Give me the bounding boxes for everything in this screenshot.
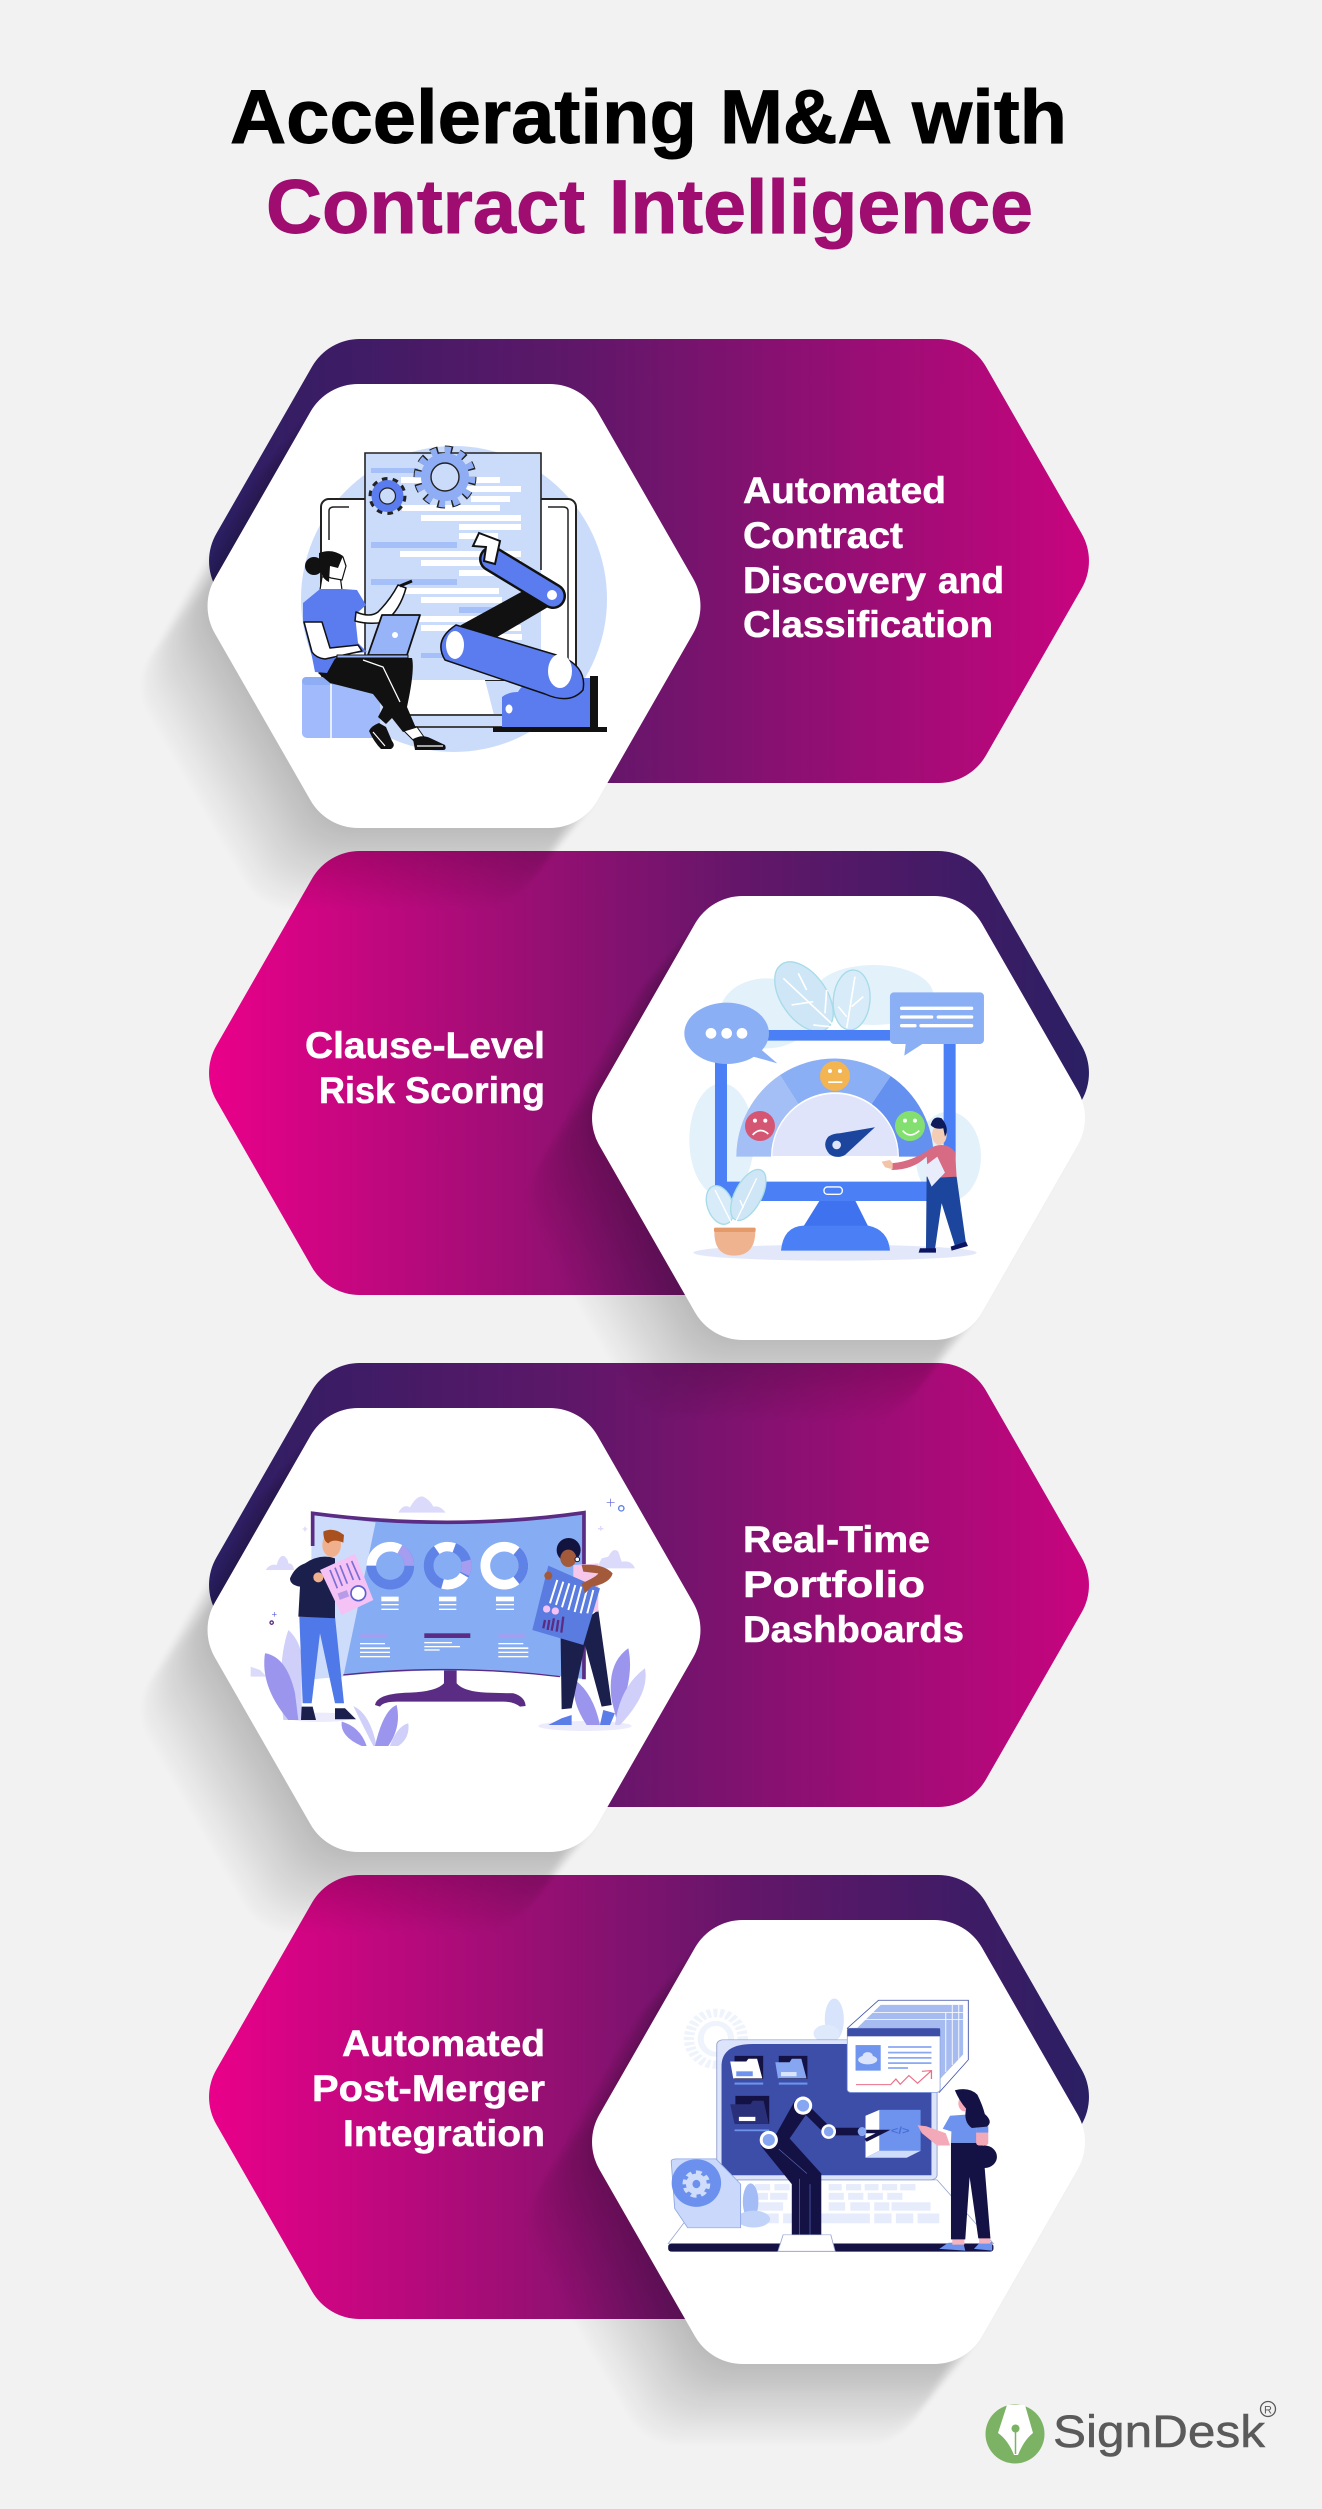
leaves (763, 951, 873, 1042)
cube with code: </> (891, 2124, 910, 2137)
logo: SignDesk (986, 2402, 1276, 2464)
donut charts (364, 1539, 531, 1592)
folders (730, 2056, 807, 2131)
man with document (882, 1117, 968, 1253)
logo: SignDesk: R (1264, 2404, 1272, 2416)
icon: pen nib (986, 2404, 1044, 2464)
gears (372, 450, 472, 512)
label: Real-Time Portfolio Dashboards (743, 1519, 964, 1650)
woman with chart (532, 1538, 615, 1725)
title: with (911, 75, 1067, 160)
panel: Real-Time Portfolio Dashboards (142, 1363, 1089, 1932)
robot arm (760, 2097, 883, 2251)
panel: Clause-Level Risk Scoring (209, 851, 1089, 1420)
label: Automated Post-Merger Integration: Integration (343, 2113, 545, 2154)
robot arm (441, 533, 607, 732)
title: Contract (266, 165, 585, 250)
label: Clause-Level Risk Scoring (305, 1025, 545, 1111)
illustration: robot arm at laptop with woman (668, 1999, 997, 2252)
label: Automated Post-Merger Integration: Automated (342, 2023, 545, 2064)
panel: Automated Post-Merger Integration (209, 1875, 1089, 2444)
illustration: risk gauge monitor (684, 951, 984, 1261)
speech bubbles (684, 992, 984, 1064)
label: Automated Post-Merger Integration (312, 2023, 545, 2154)
dashboard text lines (360, 1597, 528, 1657)
title: Intelligence (609, 165, 1033, 250)
contract document (365, 453, 541, 680)
potted plant (701, 1164, 773, 1256)
label: Automated Contract Discovery and Classification: Contract (743, 515, 903, 556)
title: M&A (720, 75, 892, 160)
monitor (321, 499, 576, 727)
label: Automated Contract Discovery and Classification (743, 470, 1004, 645)
illustration: woman with laptop and robot arm reviewing contract (301, 446, 607, 752)
panel: Automated Contract Discovery and Classification (142, 339, 1089, 908)
label: Clause-Level Risk Scoring: Clause-Level (305, 1025, 545, 1066)
label: Automated Contract Discovery and Classification: Automated (743, 470, 946, 511)
label: Clause-Level Risk Scoring: Risk (319, 1070, 395, 1111)
gauge (736, 1059, 934, 1157)
man with chart (290, 1530, 373, 1720)
title (230, 75, 1067, 250)
label: Automated Post-Merger Integration: Post-Merger (312, 2068, 545, 2109)
label: Automated Contract Discovery and Classification: Classification (743, 604, 993, 645)
cube with code (866, 2110, 921, 2158)
label: Real-Time Portfolio Dashboards: Portfolio (743, 1564, 925, 1605)
illustration: two people at curved dashboard monitor (251, 1496, 646, 1746)
label: Clause-Level Risk Scoring: Scoring (405, 1070, 545, 1111)
monitor (715, 1030, 956, 1251)
label: Automated Contract Discovery and Classification: and (938, 560, 1004, 601)
window stack (847, 2000, 968, 2092)
monitor (312, 1513, 586, 1707)
label: Automated Contract Discovery and Classification: Discovery (743, 560, 926, 601)
logo: SignDesk: SignDesk (1053, 2406, 1266, 2457)
woman (918, 2089, 997, 2251)
label: Real-Time Portfolio Dashboards: Real-Time (743, 1519, 930, 1560)
label: Real-Time Portfolio Dashboards: Dashboards (743, 1609, 964, 1650)
title: Accelerating (230, 75, 697, 160)
faces (745, 1061, 925, 1141)
gear card (671, 2159, 770, 2228)
woman with laptop (302, 551, 446, 750)
plants (264, 1630, 646, 1746)
